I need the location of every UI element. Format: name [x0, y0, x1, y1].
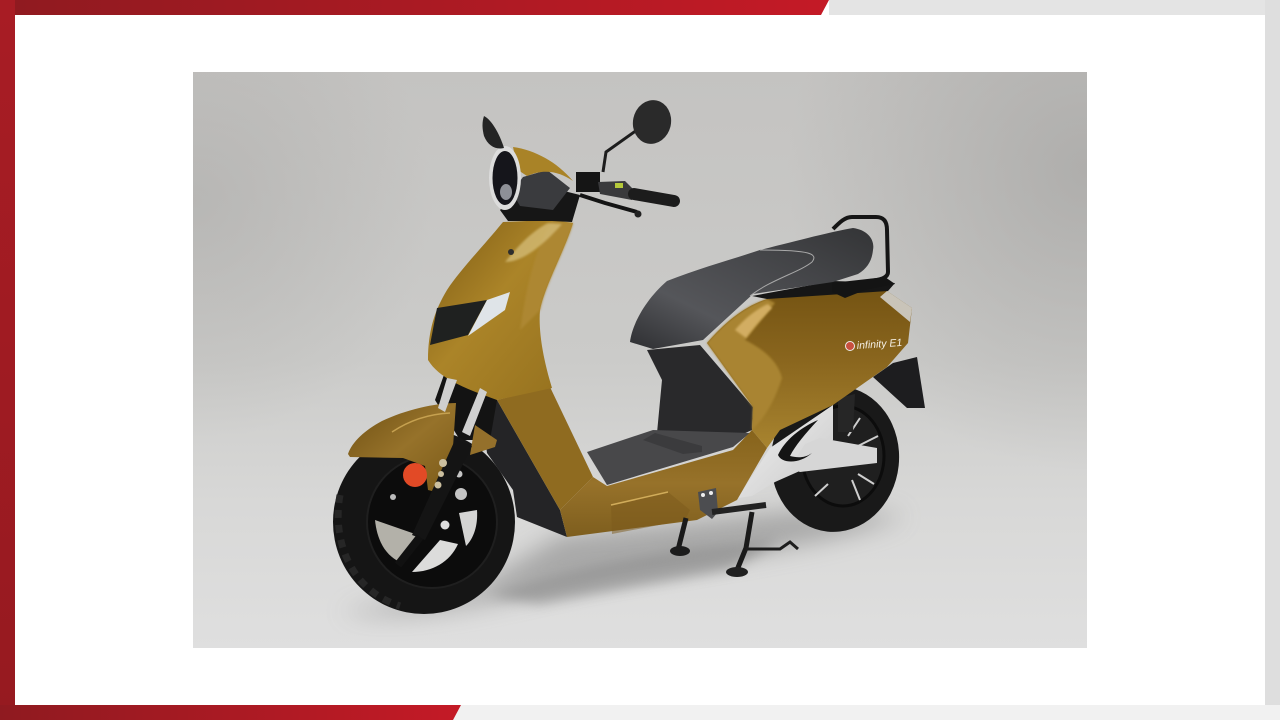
ground shadow: [340, 510, 905, 615]
pedestal under seat: [643, 433, 702, 454]
dark under-seat storage: [647, 345, 753, 447]
steering neck: [500, 190, 580, 222]
orange reflector: [403, 463, 427, 487]
rear grab rail: [832, 217, 895, 298]
rear mudguard: [873, 357, 925, 408]
turn signal and visor: [430, 292, 510, 345]
photo: studio background: [193, 72, 1087, 648]
shadow band under seat: [752, 281, 895, 299]
floor and lower body panel: [560, 430, 767, 537]
left mirror: [482, 116, 504, 148]
handlebar and grip: [576, 172, 674, 218]
footboard: [587, 430, 750, 485]
dark lower front panel: [478, 380, 567, 537]
front wheel: [333, 430, 515, 614]
cowl: [513, 147, 573, 181]
fork bolts: [434, 459, 450, 530]
dashboard housing: [512, 170, 570, 210]
rear body panel: [707, 290, 912, 448]
fender rear flap: [470, 425, 497, 455]
front fork: [398, 378, 487, 565]
front fender: [348, 403, 456, 493]
brand badge: infinity E1: infinity E1: [856, 337, 903, 352]
rear suspension spring: [838, 394, 855, 432]
headlight: [489, 146, 521, 210]
front leg shield: [428, 220, 593, 510]
white side panel and swingarm: [738, 405, 877, 498]
center stand: [698, 488, 798, 577]
rear wheel: [764, 380, 906, 538]
right mirror: [603, 97, 675, 172]
fork shadow area: [435, 372, 497, 440]
seat: [630, 228, 873, 349]
side stand: [670, 518, 690, 556]
